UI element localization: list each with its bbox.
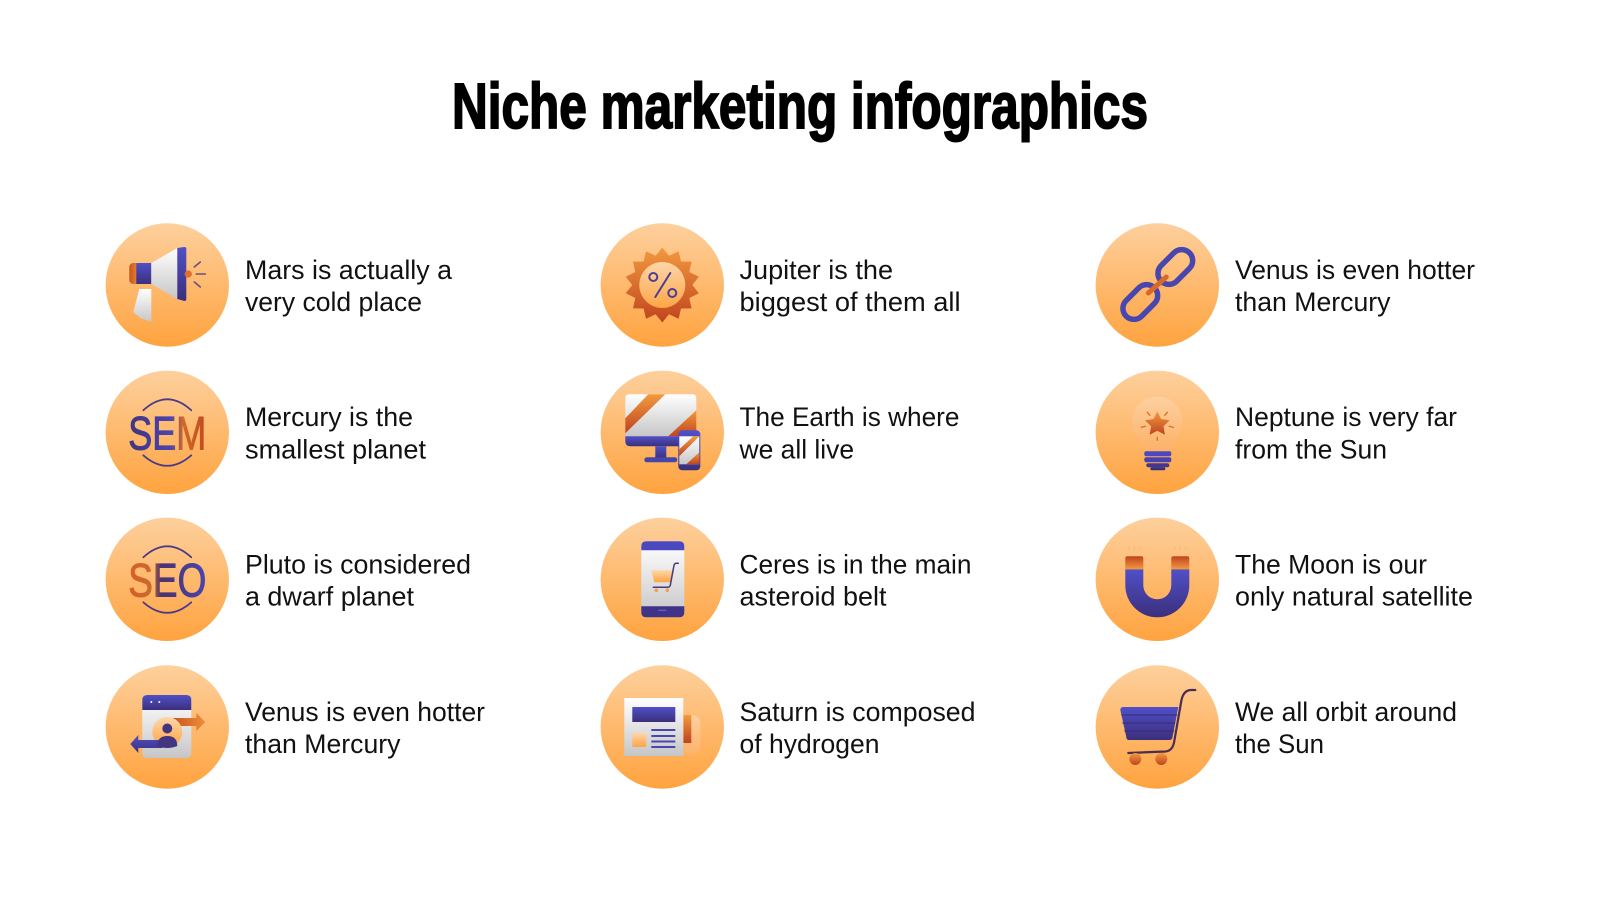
item: SEM, Mercury (106, 371, 426, 494)
text: Neptune: Neptune is very far (1235, 402, 1457, 432)
icon: SEO: SEO (128, 553, 206, 606)
text: Mars (245, 255, 453, 317)
icon: chain link (1118, 245, 1197, 324)
text: Pluto (245, 549, 471, 611)
text: Earth: we all live (739, 434, 854, 464)
text: Mars: Mars is actually a (245, 255, 453, 285)
text: Jupiter: Jupiter is the (740, 255, 893, 285)
icon: megaphone (129, 247, 205, 322)
icon: SEM: SEM (128, 406, 206, 459)
icon: light bulb with star (1132, 396, 1182, 470)
circle badge (1096, 665, 1219, 789)
text: Saturn: of hydrogen (740, 729, 880, 759)
circle badge (106, 371, 229, 494)
item: discount badge, Jupiter (601, 223, 960, 347)
icon: monitor and phone (625, 394, 700, 470)
text: Jupiter (740, 255, 960, 317)
text: Moon: only natural satellite (1235, 581, 1473, 611)
text: orbit: the Sun (1235, 729, 1324, 759)
text: Mercury: Mercury is the (245, 402, 413, 432)
icon: magnet (1125, 546, 1189, 617)
circle badge (601, 223, 724, 347)
item: megaphone, Mars (106, 223, 453, 347)
text: orbit (1235, 697, 1457, 759)
text: Venus (1235, 255, 1475, 317)
text: Pluto: a dwarf planet (245, 581, 414, 611)
text: Moon: The Moon is our (1235, 549, 1427, 579)
text: Mercury (245, 402, 426, 464)
item: magnet, Moon (1096, 518, 1473, 641)
text: Venus: than Mercury (245, 729, 401, 759)
text: Venus: than Mercury (1235, 287, 1391, 317)
text: Ceres: asteroid belt (740, 581, 887, 611)
text: Saturn (740, 697, 976, 759)
item: mobile shop, Ceres (601, 518, 972, 641)
item: shopping cart, orbit (1096, 665, 1457, 789)
icon: browser window with user and arrows (130, 695, 205, 758)
text: Mars: very cold place (245, 287, 422, 317)
icon: phone with cart (641, 541, 684, 617)
text: Earth (739, 402, 960, 464)
circle badge (601, 371, 724, 494)
item: newspaper, Saturn (601, 665, 976, 789)
item: web user traffic, Venus (106, 665, 485, 789)
circle badge (106, 223, 229, 347)
text: Venus: Venus is even hotter (1235, 255, 1475, 285)
circle badge (601, 518, 724, 641)
icon: percent badge (626, 248, 699, 322)
circle badge (1096, 223, 1219, 347)
text: Pluto: Pluto is considered (245, 549, 471, 579)
icon: SEO (128, 546, 206, 613)
text: Jupiter: biggest of them all (740, 287, 960, 317)
icon: SEM (128, 399, 206, 466)
icon: newspaper (624, 698, 700, 756)
text: Ceres: Ceres is in the main (740, 549, 972, 579)
circle badge (1096, 518, 1219, 641)
item: chain link, Venus (1096, 223, 1475, 347)
text: Mercury: smallest planet (245, 434, 426, 464)
text: Moon (1235, 549, 1473, 611)
circle badge (106, 665, 229, 789)
item: SEO, Pluto (106, 518, 471, 641)
item: devices, Earth (601, 371, 960, 494)
text: Earth: The Earth is where (740, 402, 960, 432)
text: orbit: We all orbit around (1235, 697, 1457, 727)
text: Neptune: from the Sun (1235, 434, 1387, 464)
text: Saturn: Saturn is composed (740, 697, 976, 727)
circle badge (1096, 371, 1219, 494)
icon: shopping cart (1120, 690, 1195, 765)
text: Venus: Venus is even hotter (245, 697, 485, 727)
circle badge (106, 518, 229, 641)
title: Niche marketing infographics (452, 70, 1148, 142)
item: light bulb, Neptune (1096, 371, 1457, 494)
circle badge (601, 665, 724, 789)
text: Ceres (740, 549, 972, 611)
text: Neptune (1235, 402, 1457, 464)
text: Venus (245, 697, 485, 759)
